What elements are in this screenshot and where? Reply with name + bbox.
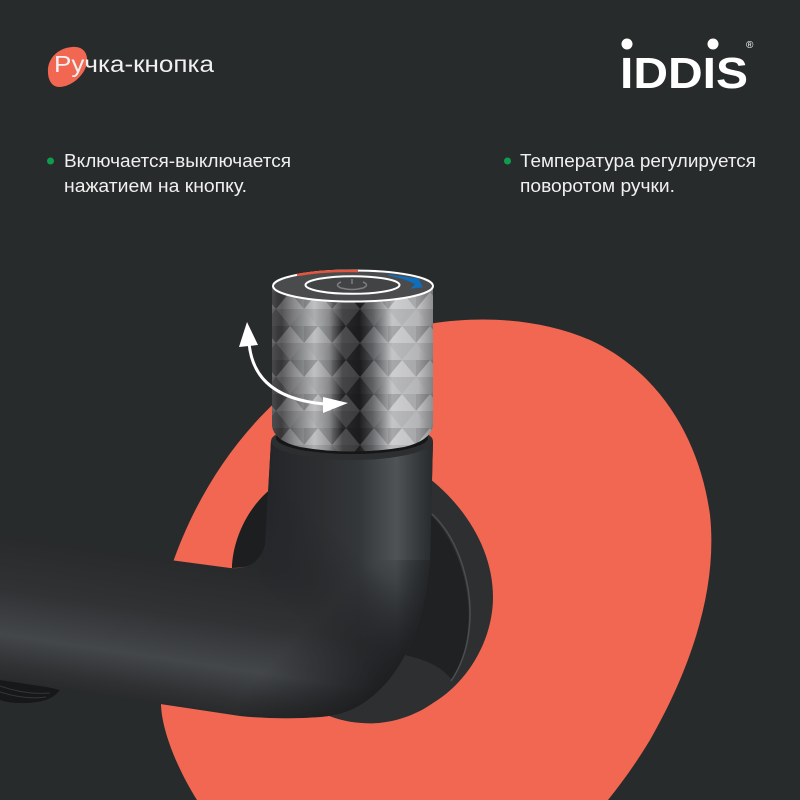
arrow curve xyxy=(249,342,325,404)
wall flange xyxy=(232,475,493,723)
collar xyxy=(271,422,433,460)
power symbol xyxy=(338,279,366,290)
feature text: on and off xyxy=(47,151,291,196)
riser shading xyxy=(268,442,433,628)
logo dot one xyxy=(622,38,632,50)
knob xyxy=(270,270,435,460)
knob top face xyxy=(273,270,433,302)
text line one: Температура регулируется xyxy=(520,151,756,171)
collar shadow ring xyxy=(276,422,428,454)
flange right side xyxy=(320,475,493,723)
rotation arrow xyxy=(239,322,348,413)
arrow head right xyxy=(323,397,348,413)
flange left side xyxy=(232,488,272,568)
feature text: temperature xyxy=(504,151,756,196)
knob side with diamonds xyxy=(272,286,433,452)
faucet body xyxy=(0,430,440,730)
red scale xyxy=(297,271,358,275)
green bullet xyxy=(47,158,54,164)
arrow head up xyxy=(239,322,258,347)
threaded nut xyxy=(0,676,60,703)
flange inner face xyxy=(405,512,469,680)
text line two: поворотом ручки. xyxy=(520,176,675,196)
logo dot two xyxy=(708,38,718,50)
button ring xyxy=(306,276,400,294)
spout shading xyxy=(0,430,440,730)
text line two: нажатием на кнопку. xyxy=(64,176,247,196)
flange edge highlight xyxy=(432,514,470,681)
logo: IDDIS xyxy=(620,38,754,98)
logo wordmark: IDDIS xyxy=(620,49,748,98)
heading: Ручка-кнопка xyxy=(48,47,214,87)
text line one: Включается-выключается xyxy=(64,151,291,171)
elbow shadow xyxy=(242,560,428,718)
coral blob xyxy=(161,320,711,800)
riser top xyxy=(271,422,433,460)
registered mark: ® xyxy=(746,40,754,51)
blue scale xyxy=(388,275,422,288)
heading text: Ручка-кнопка xyxy=(54,51,214,77)
heading blob xyxy=(48,47,87,87)
green bullet xyxy=(504,158,511,164)
